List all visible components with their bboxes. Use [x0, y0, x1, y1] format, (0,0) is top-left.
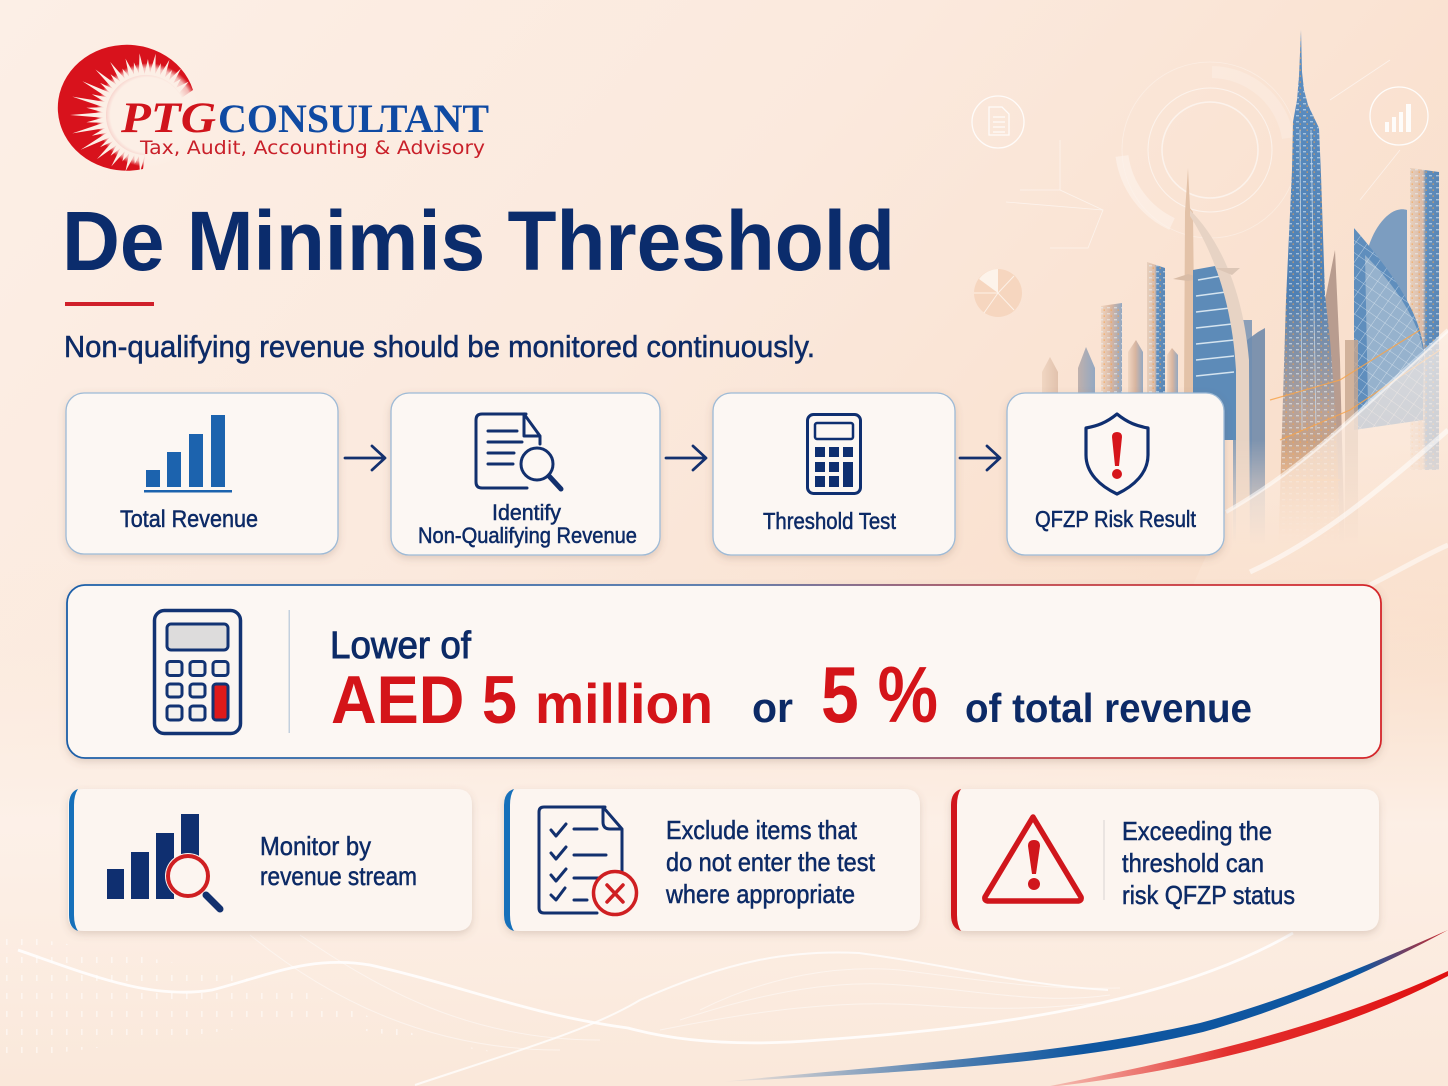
- panel: qfzp risk result: [1007, 393, 1224, 555]
- label: Identify: [492, 500, 561, 525]
- text: 5 percent: 5 %: [821, 650, 938, 739]
- label: QFZP Risk Result: [1035, 506, 1197, 532]
- panel: threshold formula: [67, 585, 1381, 758]
- icon: shield: [1086, 414, 1148, 494]
- logo wordmark PTG: PTG: [120, 95, 216, 142]
- icon: pie chart: [974, 269, 1022, 317]
- text: [665, 815, 876, 909]
- text: [260, 831, 417, 891]
- text: AED 5 million: AED 5: [331, 662, 517, 738]
- label: Non-Qualifying Revenue: [418, 523, 637, 548]
- text: where appropriate: [665, 879, 855, 909]
- label: Threshold Test: [763, 508, 897, 534]
- divider: [288, 610, 290, 733]
- subtitle: Non-qualifying revenue should be monitored continuously.: [64, 329, 815, 364]
- text: or: or: [752, 684, 793, 731]
- panel: exceeding the threshold: [951, 789, 1379, 931]
- accent bar: [69, 789, 78, 931]
- Burj Al Arab: [1173, 168, 1250, 560]
- label: Total Revenue: [120, 506, 258, 533]
- icon: checklist with cross: [539, 807, 636, 914]
- logo: [58, 45, 489, 173]
- arrow: [666, 446, 706, 470]
- skyline illustration: [1042, 30, 1440, 560]
- text: Exceeding the: [1122, 816, 1272, 846]
- label: [418, 500, 637, 548]
- title: De Minimis Threshold: [62, 194, 895, 288]
- text: Exclude items that: [666, 815, 858, 845]
- panel: exclude items: [504, 789, 920, 931]
- text: do not enter the test: [666, 847, 876, 877]
- panel: threshold test: [713, 393, 955, 555]
- accent bar: [951, 789, 961, 931]
- icon: warning triangle: [985, 817, 1081, 901]
- text: lower of: Lower of: [330, 625, 471, 667]
- icon: calculator: [808, 414, 860, 494]
- panel: monitor by revenue stream: [68, 789, 472, 931]
- panel: total revenue: [66, 393, 338, 554]
- icon: document circle: [972, 96, 1024, 148]
- panel: identify non-qualifying revenue: [391, 393, 660, 555]
- divider: [1104, 820, 1105, 900]
- text: AED 5 million: million: [535, 672, 713, 735]
- decorative blue and red swooshes: [720, 930, 1448, 1086]
- text: risk QFZP status: [1122, 880, 1295, 910]
- logo wordmark CONSULTANT: CONSULTANT: [218, 96, 489, 141]
- text: of total revenue: of total revenue: [965, 685, 1252, 731]
- text: threshold can: [1122, 848, 1264, 878]
- small towers left: [1042, 262, 1265, 524]
- text: [1122, 816, 1295, 910]
- arrow: [960, 446, 1000, 470]
- logo burst: [58, 45, 200, 173]
- text: revenue stream: [260, 861, 417, 891]
- text: AED 5 million: [331, 662, 713, 738]
- gold network lines: [1270, 330, 1440, 480]
- text: Monitor by: [260, 831, 371, 861]
- right cluster: [1354, 168, 1439, 470]
- title accent line: [65, 302, 154, 306]
- icon: bar chart: [144, 415, 232, 492]
- accent bar: [504, 789, 514, 931]
- logo tagline: Tax, Audit, Accounting & Advisory: [139, 137, 485, 159]
- icon: bars and magnifier: [107, 814, 220, 909]
- icon: chart circle: [1370, 87, 1428, 145]
- arrow: [345, 446, 385, 470]
- decorative bottom waves: [0, 933, 1293, 1085]
- icon: document with magnifier: [476, 414, 561, 489]
- decorative hud circles and network: [1006, 60, 1400, 248]
- Burj Khalifa: [1278, 30, 1358, 560]
- icon: large calculator: [154, 610, 240, 734]
- decorative white wave top right: [1150, 330, 1448, 680]
